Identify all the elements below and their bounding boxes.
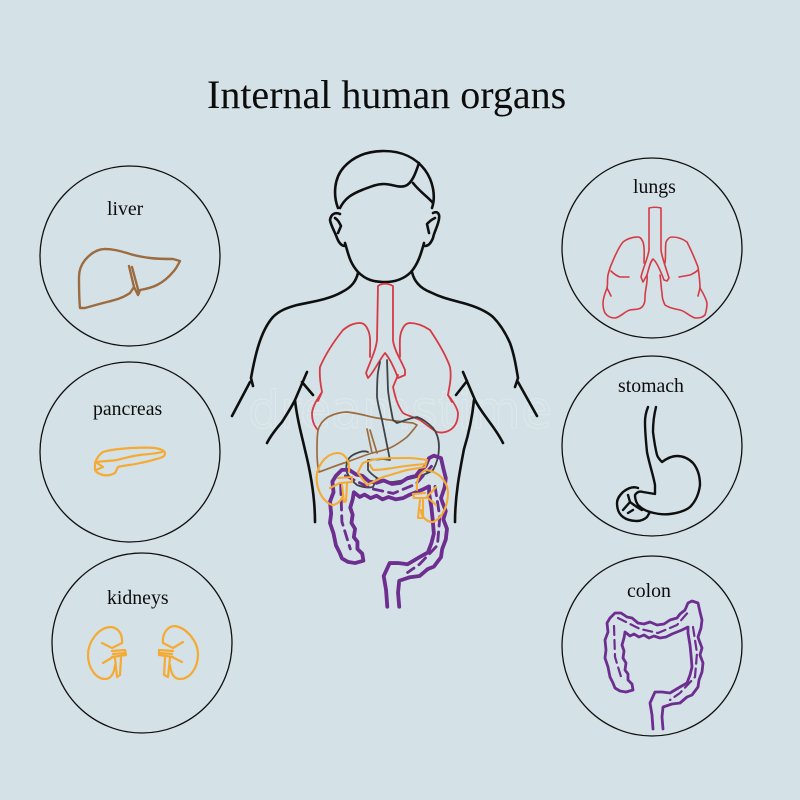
panel: pancreas xyxy=(40,362,220,542)
text: dreamstime xyxy=(248,381,552,441)
label: lungs: lungs xyxy=(633,176,676,198)
figure: human body with organs xyxy=(232,151,537,607)
icon: stomach xyxy=(617,407,700,521)
torso and arms outline xyxy=(232,272,537,522)
head and hair outline xyxy=(330,151,439,282)
label: pancreas: pancreas xyxy=(93,398,162,420)
organ: stomach xyxy=(346,360,439,487)
icon: liver xyxy=(79,249,180,308)
icon: kidneys xyxy=(88,626,198,679)
panel: kidneys xyxy=(52,553,232,733)
panel: stomach xyxy=(562,356,742,536)
panel: colon xyxy=(562,556,742,736)
icon: colon xyxy=(605,601,703,729)
title: Internal human organs xyxy=(207,72,566,117)
organ: right kidney xyxy=(413,470,448,522)
label: stomach: stomach xyxy=(618,375,684,397)
label: colon: colon xyxy=(627,580,671,602)
organ: liver xyxy=(317,412,417,472)
organ: pancreas xyxy=(358,458,427,485)
panel: liver xyxy=(40,166,220,346)
icon: lungs xyxy=(603,207,707,318)
label: liver: liver xyxy=(107,198,144,220)
organ: left kidney xyxy=(317,453,352,505)
label: kidneys: kidneys xyxy=(107,587,169,609)
organ: colon xyxy=(330,456,447,607)
panel: lungs xyxy=(562,158,742,338)
icon: pancreas xyxy=(95,448,165,475)
organ: lungs and trachea xyxy=(312,284,458,433)
